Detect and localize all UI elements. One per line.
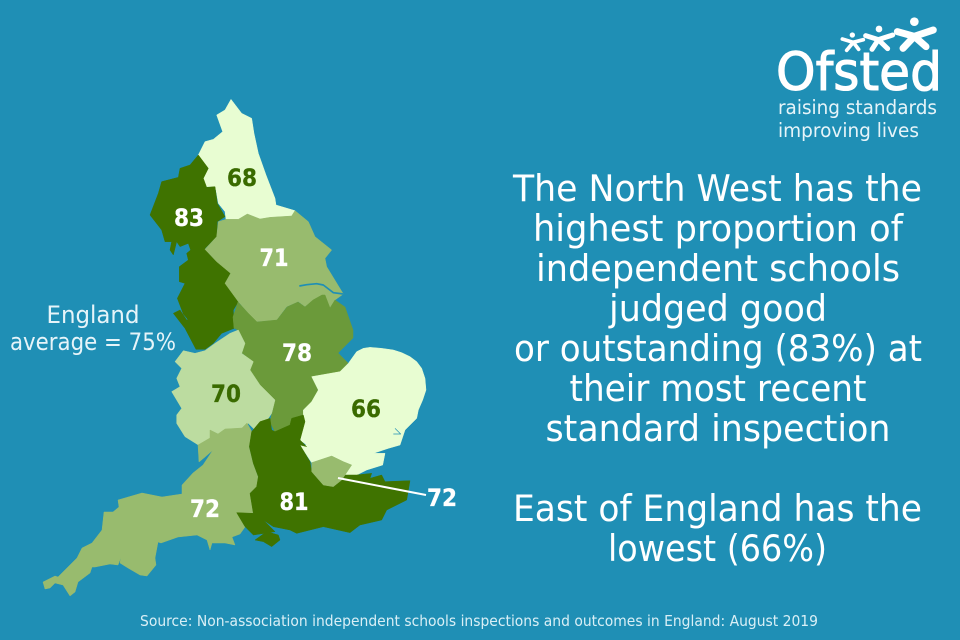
value: East of England: 66 <box>351 395 381 423</box>
England average note: England <box>46 301 140 329</box>
logo strapline: improving lives <box>778 119 919 142</box>
region: South West <box>43 423 258 596</box>
main statement text: their most recent <box>570 367 866 410</box>
England average note <box>10 301 176 356</box>
region: North East <box>198 99 295 219</box>
logo strapline: raising standards <box>778 96 937 119</box>
main statement text: standard inspection <box>546 407 890 450</box>
main statement text: judged good <box>608 287 827 330</box>
value: South East: 81 <box>280 488 308 516</box>
map of England regions <box>43 99 426 596</box>
region: London <box>312 456 352 487</box>
England average note: average = 75% <box>10 328 176 356</box>
icon: three figures <box>842 17 933 50</box>
main statement text: or outstanding (83%) at <box>514 327 922 370</box>
logo wordmark: Ofsted <box>776 42 942 103</box>
region: Yorkshire and the Humber <box>205 211 343 322</box>
source note: Source: Non-association independent schools inspections and outcomes in England: August 2019 <box>140 612 818 630</box>
region: East Midlands <box>233 295 353 432</box>
leader line: London <box>338 478 426 495</box>
main statement text: The North West has the <box>512 167 922 210</box>
value: East Midlands: 78 <box>282 339 312 367</box>
value labels <box>174 164 457 523</box>
main statement text: highest proportion of <box>533 207 904 250</box>
value: London: 72 <box>427 484 457 512</box>
value: North West: 83 <box>174 204 204 232</box>
region: North West <box>150 155 238 349</box>
region: West Midlands <box>172 330 275 445</box>
value: South West: 72 <box>190 495 220 523</box>
value: North East: 68 <box>227 164 257 192</box>
logo: Ofsted <box>776 17 942 142</box>
region: Isle of Wight <box>255 532 280 547</box>
logo strapline <box>778 96 937 142</box>
main statement text: independent schools <box>536 247 900 290</box>
main statement text: East of England has the <box>513 487 922 530</box>
region: South East <box>237 415 410 535</box>
main statement text: lowest (66%) <box>608 527 827 570</box>
value: West Midlands: 70 <box>211 380 241 408</box>
region: East of England <box>300 347 426 475</box>
main statement text <box>512 167 922 570</box>
value: Yorkshire: 71 <box>260 244 288 272</box>
